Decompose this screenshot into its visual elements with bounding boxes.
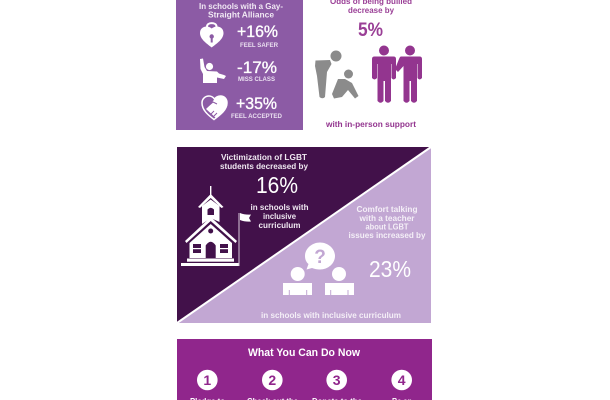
icon: school house xyxy=(181,186,251,266)
stat: feel accepted xyxy=(231,94,283,120)
text: comfort talking: Comfort talking xyxy=(356,204,418,214)
text: comfort talking: issues increased by xyxy=(348,230,426,240)
text: in schools with inclusive curriculum: inclusive xyxy=(263,211,296,221)
icon: heart lock xyxy=(200,23,224,48)
caption: with in-person support: with in-person support xyxy=(325,119,416,129)
panel: in-person support xyxy=(315,0,422,129)
text: victimization: Victimization of LGBT xyxy=(221,152,308,162)
heading: gay-straight alliance: Straight Alliance xyxy=(208,10,274,20)
action 4 xyxy=(391,370,412,400)
panel: what you can do now xyxy=(177,339,432,400)
text: in schools with inclusive curriculum: curriculum xyxy=(258,220,301,230)
action 1 xyxy=(190,370,225,400)
left person xyxy=(372,56,396,103)
panel: inclusive curriculum xyxy=(177,147,431,323)
heading: gay-straight alliance: In schools with a Gay- xyxy=(199,1,283,11)
stat: 16%: 16% xyxy=(256,172,298,198)
action 2 xyxy=(247,370,298,400)
action 3: 3 xyxy=(333,372,341,388)
stat: 5%: 5% xyxy=(358,20,383,41)
action 3 xyxy=(312,370,362,400)
stat: feel accepted: FEEL ACCEPTED xyxy=(231,114,283,120)
icon: bully and crouching victim xyxy=(315,50,358,98)
text: in schools with inclusive curriculum: in schools with xyxy=(250,202,308,212)
heading: gay-straight alliance xyxy=(199,1,283,20)
action 4: 4 xyxy=(398,372,406,388)
stat: feel accepted: +35% xyxy=(236,94,277,113)
stat: miss class: -17% xyxy=(237,58,277,77)
heading: odds of being bullied: decrease by xyxy=(348,5,394,15)
stat: feel safer: +16% xyxy=(237,22,278,41)
text: comfort talking: with a teacher xyxy=(359,213,415,223)
text: comfort talking: about LGBT xyxy=(366,222,409,232)
stat: miss class: MISS CLASS xyxy=(238,77,275,83)
text: victimization xyxy=(220,152,308,171)
stat: 23%: 23% xyxy=(369,256,411,282)
icon: two people with question bubble xyxy=(283,242,354,295)
panel: gay-straight alliance xyxy=(176,0,303,130)
icon: student raising hand xyxy=(200,58,226,83)
icon: handshake heart xyxy=(202,96,227,120)
heading: odds of being bullied xyxy=(330,0,412,15)
text: victimization: students decreased by xyxy=(220,161,308,171)
stat: feel safer xyxy=(237,22,279,49)
icon: two people with question bubble: ? xyxy=(314,247,326,268)
heading: what you can do now: What You Can Do Now xyxy=(248,347,360,359)
stat: feel safer: FEEL SAFER xyxy=(240,43,279,49)
icon: two supportive people xyxy=(372,46,422,103)
text: comfort talking xyxy=(348,204,426,240)
right person xyxy=(395,56,422,103)
text: in schools with inclusive curriculum xyxy=(250,202,308,230)
action 2: 2 xyxy=(268,372,276,388)
action 1: 1 xyxy=(203,372,211,388)
caption: in schools with inclusive curriculum: in schools with inclusive curriculum xyxy=(261,310,401,320)
